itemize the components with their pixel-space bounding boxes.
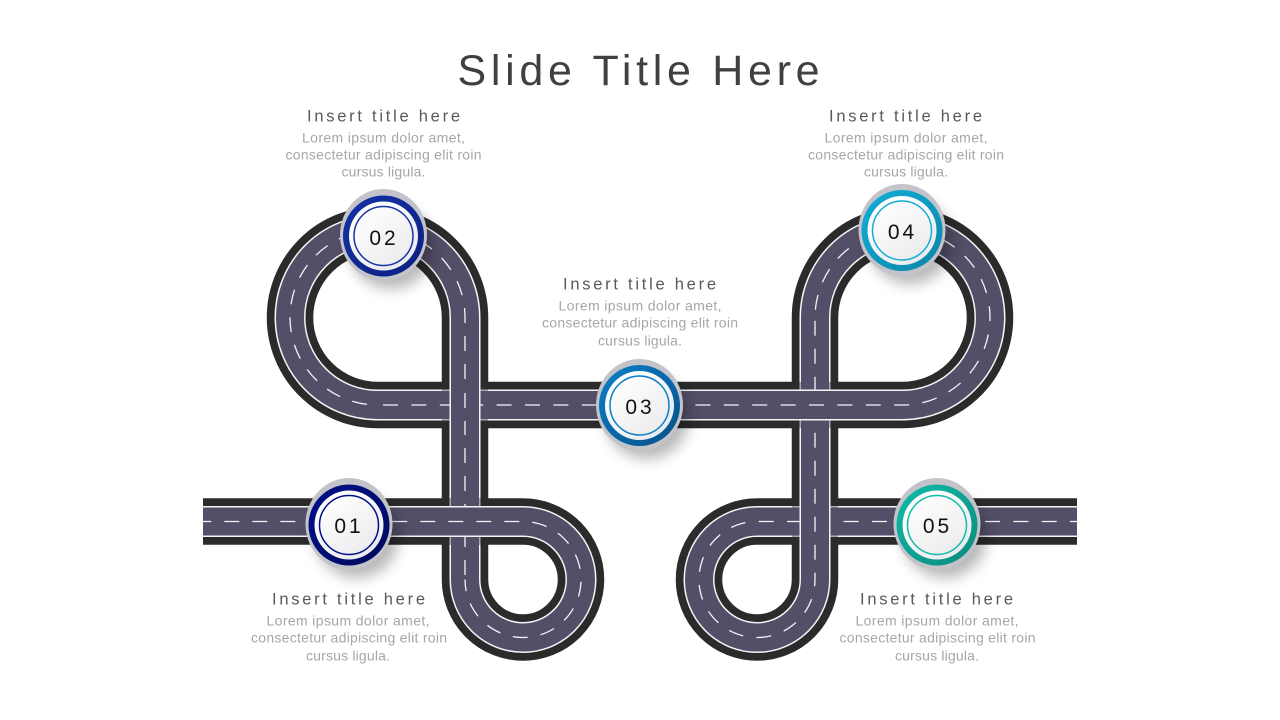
- step 03 marker: 03: [625, 396, 655, 419]
- text block: step 05: Lorem ipsum dolor amet,: [856, 612, 1018, 628]
- text block: step 04: cursus ligula.: [864, 164, 948, 180]
- text block: step 01: Lorem ipsum dolor amet,: [266, 612, 430, 628]
- text block: step 03: [542, 276, 738, 348]
- text block: step 02: Insert title here: [307, 108, 460, 126]
- text block: step 01: consectetur adipiscing elit roin: [251, 630, 447, 646]
- text block: step 05: [840, 590, 1036, 664]
- winding road: [203, 230, 1077, 637]
- step 04 marker: [858, 184, 952, 284]
- step 03 marker: [596, 359, 689, 459]
- text block: step 05: Insert title here: [860, 590, 1013, 608]
- text block: step 03: cursus ligula.: [598, 332, 682, 348]
- step 05 marker: 05: [923, 515, 952, 538]
- text block: step 05: consectetur adipiscing elit roin: [840, 630, 1036, 646]
- text block: step 02: Lorem ipsum dolor amet,: [302, 130, 465, 146]
- step 02 marker: [340, 189, 433, 289]
- step 02 marker: 02: [369, 227, 399, 250]
- text block: step 03: consectetur adipiscing elit roin: [542, 314, 738, 330]
- text block: step 04: [808, 108, 1004, 180]
- step 04 marker: 04: [888, 221, 917, 244]
- step 05 marker: [894, 478, 987, 578]
- title: Slide Title Here: [458, 47, 820, 95]
- text block: step 05: cursus ligula.: [895, 648, 979, 664]
- text block: step 04: Insert title here: [829, 108, 982, 126]
- step 01 marker: [306, 478, 399, 578]
- text block: step 04: consectetur adipiscing elit roin: [808, 146, 1004, 162]
- text block: step 02: consectetur adipiscing elit roin: [286, 146, 482, 162]
- text block: step 02: cursus ligula.: [342, 164, 426, 180]
- text block: step 03: Insert title here: [563, 276, 716, 294]
- text block: step 01: Insert title here: [272, 590, 425, 608]
- step 01 marker: 01: [334, 515, 364, 538]
- text block: step 01: [251, 590, 447, 664]
- text block: step 02: [286, 108, 482, 180]
- text block: step 04: Lorem ipsum dolor amet,: [824, 130, 988, 146]
- text block: step 01: cursus ligula.: [306, 648, 390, 664]
- text block: step 03: Lorem ipsum dolor amet,: [558, 298, 722, 314]
